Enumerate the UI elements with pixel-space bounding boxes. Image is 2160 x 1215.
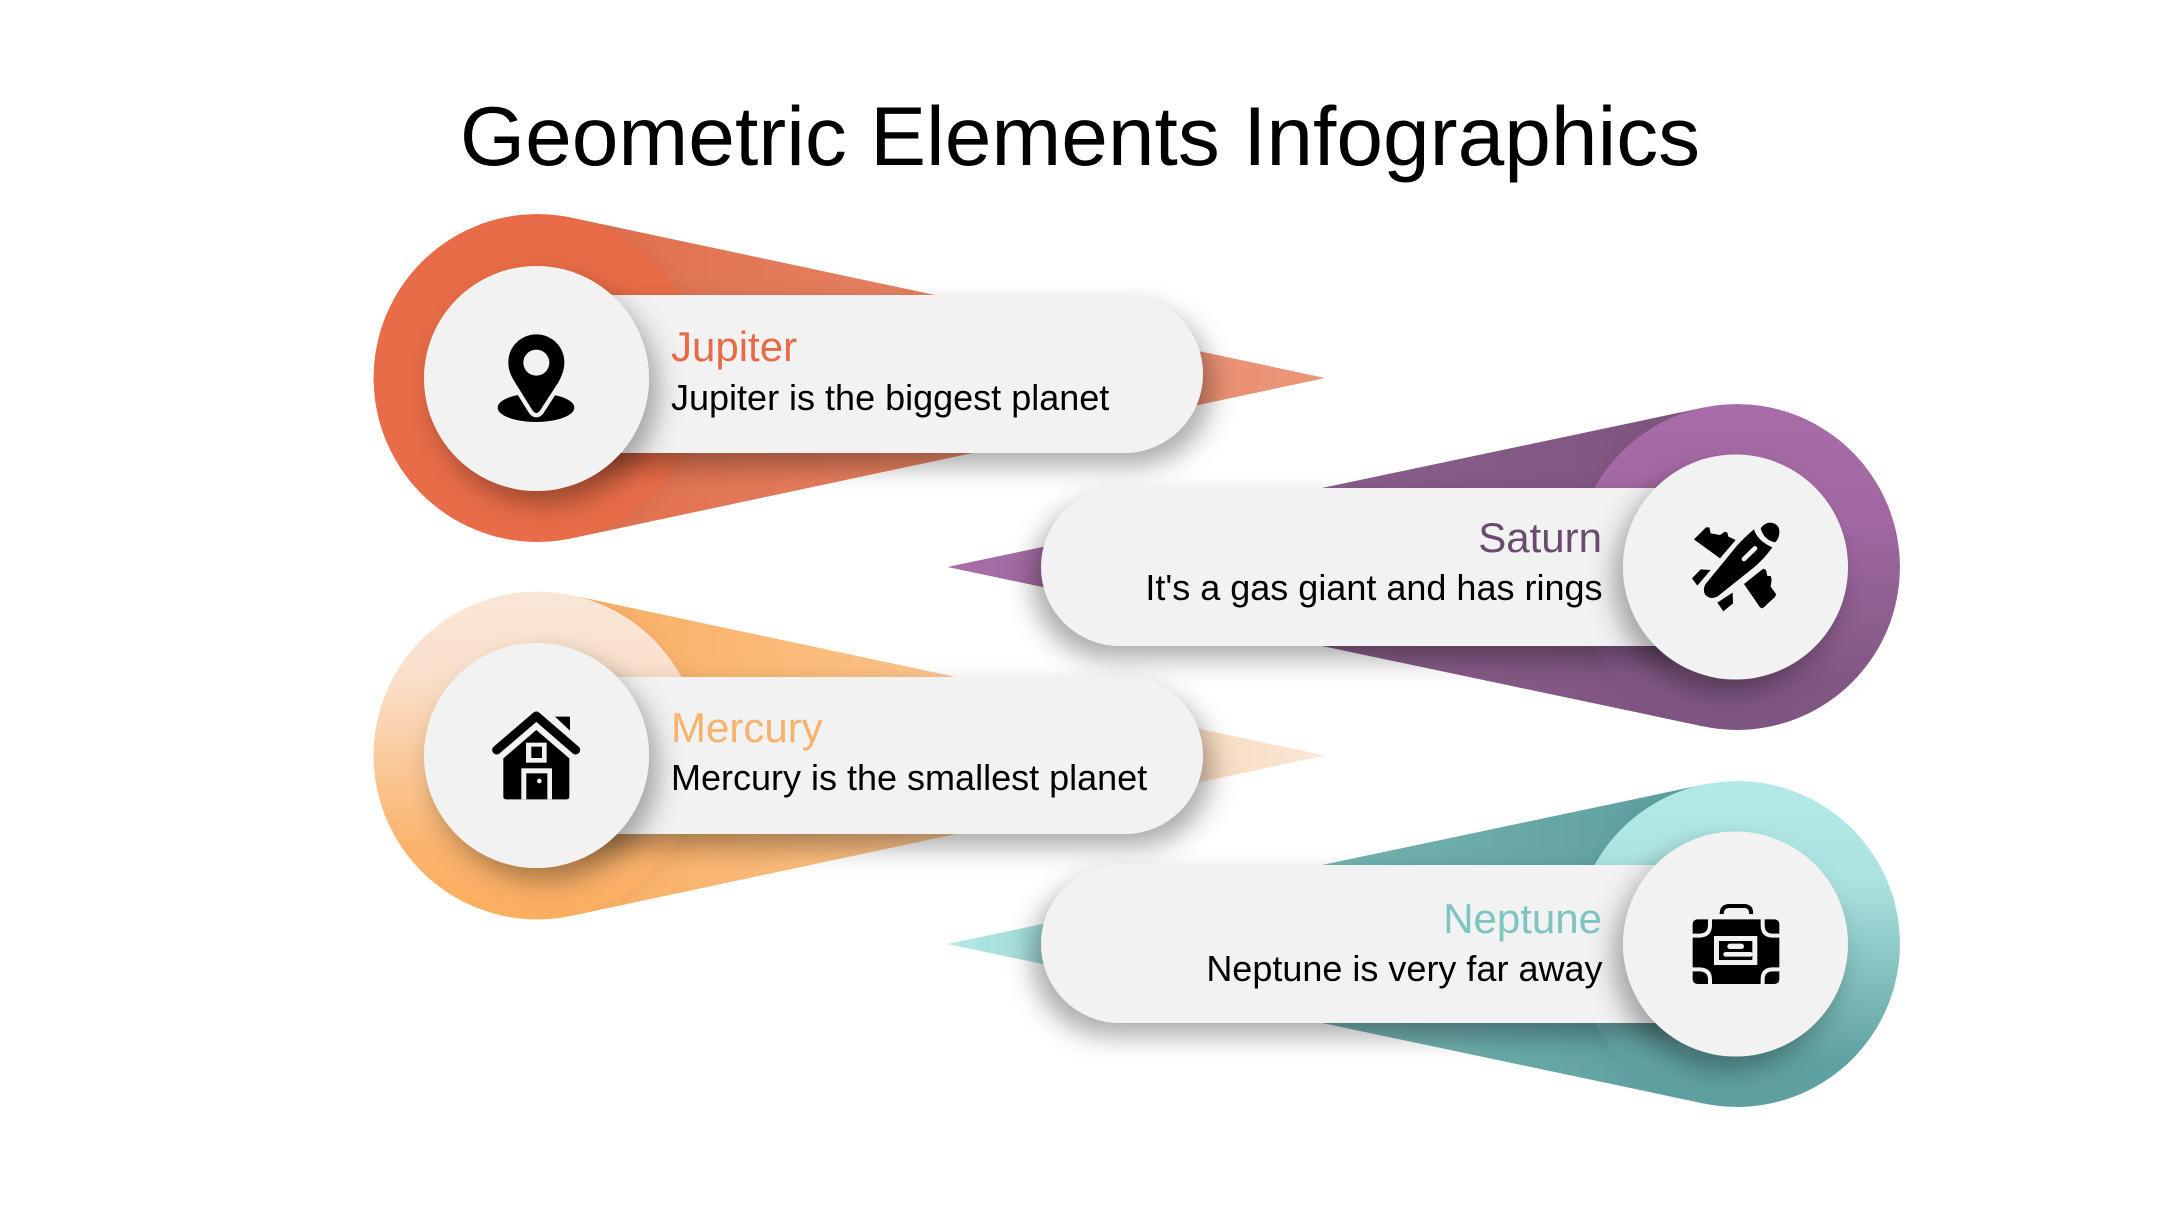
icon: house xyxy=(497,716,576,799)
text pill: Saturn xyxy=(1041,488,1741,646)
heading: Mercury: Mercury xyxy=(671,704,823,751)
description: Saturn: It's a gas giant and has rings xyxy=(1145,567,1602,608)
icon: map pin xyxy=(498,334,574,422)
title: Geometric Elements Infographics xyxy=(460,89,1700,183)
icon circle: Neptune xyxy=(1623,832,1848,1056)
teardrop: Saturn xyxy=(947,404,1900,730)
description: Mercury: Mercury is the smallest planet xyxy=(671,757,1147,798)
teardrop: Neptune xyxy=(947,781,1900,1107)
panel: Saturn xyxy=(947,404,1900,730)
heading: Jupiter: Jupiter xyxy=(671,323,797,370)
panel: Mercury xyxy=(374,592,1326,920)
teardrop: Mercury xyxy=(374,592,1326,920)
description: Jupiter: Jupiter is the biggest planet xyxy=(671,377,1109,418)
icon: suitcase xyxy=(1691,906,1781,985)
text pill: Jupiter xyxy=(500,295,1203,453)
icon circle: Jupiter xyxy=(424,266,649,491)
icon: airplane xyxy=(1692,523,1779,611)
panel: Jupiter xyxy=(374,214,1326,542)
teardrop: Jupiter xyxy=(374,214,1326,542)
heading: Neptune: Neptune xyxy=(1443,895,1602,942)
text pill: Neptune xyxy=(1041,865,1741,1023)
heading: Saturn: Saturn xyxy=(1478,514,1602,561)
icon circle: Saturn xyxy=(1623,454,1848,680)
description: Neptune: Neptune is very far away xyxy=(1206,948,1602,989)
panel: Neptune xyxy=(947,781,1900,1107)
icon circle: Mercury xyxy=(424,643,649,868)
text pill: Mercury xyxy=(500,677,1203,834)
